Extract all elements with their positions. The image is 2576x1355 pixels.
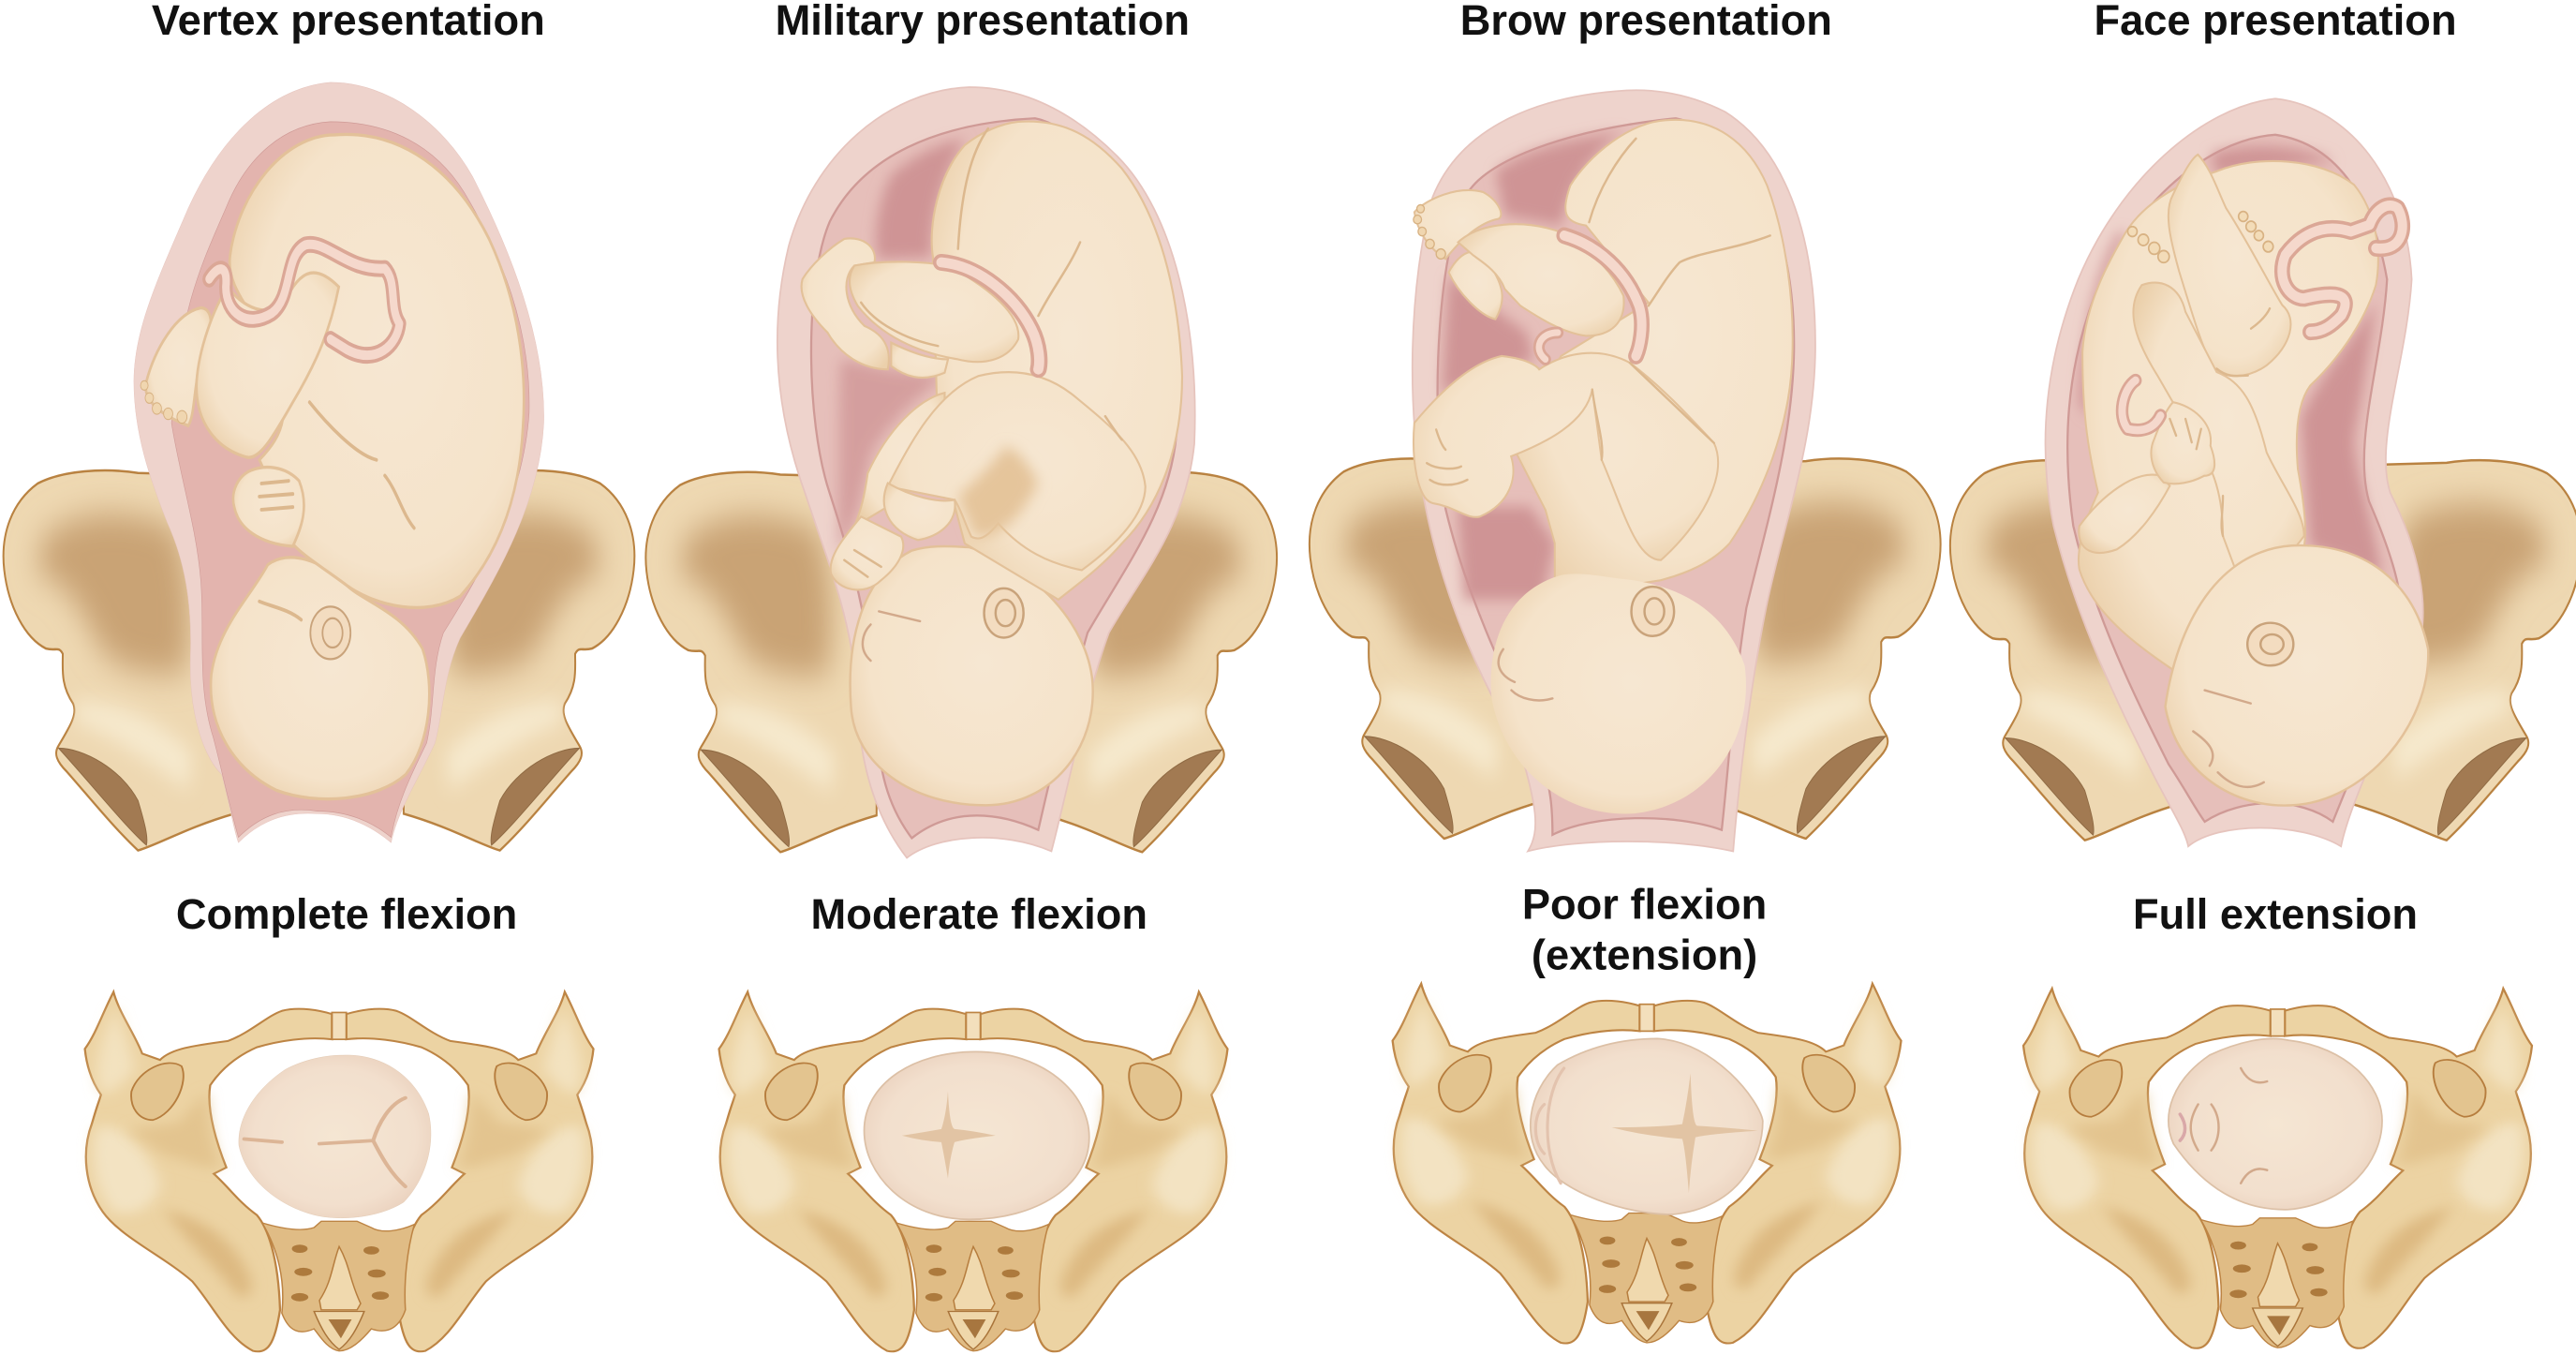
umbilical cord [2122, 205, 2403, 430]
toes [2127, 212, 2273, 262]
pelvis [645, 472, 1277, 852]
toes [1414, 205, 1445, 259]
fetal head with face [2169, 1038, 2382, 1210]
uterine cavity [811, 118, 1177, 838]
uterine cavity [1438, 118, 1794, 835]
knee hollow shading [958, 446, 1038, 537]
leg [197, 273, 339, 457]
label: Complete flexion: Complete flexion [176, 890, 517, 938]
panel: military fetus in uterus [645, 87, 1277, 857]
umbilical cord [941, 262, 1039, 369]
uterus [2045, 98, 2423, 846]
panel: face fetus in uterus [1950, 98, 2576, 846]
foot [1414, 190, 1501, 259]
foot [145, 308, 211, 425]
forearm [2079, 475, 2169, 553]
umbilical cord [1539, 235, 1642, 359]
uterus [1413, 90, 1815, 851]
lower leg [1458, 224, 1624, 335]
panel: moderate flexion pelvic view [719, 992, 1227, 1351]
shin of upper leg [2169, 155, 2290, 376]
fetal body [229, 134, 524, 607]
uterine cavity [171, 122, 529, 838]
pelvis [2023, 989, 2532, 1348]
hand [831, 516, 903, 589]
foot [802, 238, 889, 369]
pelvis [1393, 984, 1902, 1344]
uterine cavity [2067, 135, 2403, 822]
trunk [932, 122, 1182, 600]
lower leg [2133, 283, 2304, 587]
uterus [134, 82, 544, 842]
face [863, 611, 920, 661]
ear [310, 606, 350, 659]
ear [985, 588, 1024, 637]
trunk [1511, 120, 1793, 597]
panel: poor flexion pelvic view [1393, 984, 1902, 1344]
ear [2247, 623, 2293, 665]
fist [233, 468, 303, 546]
rear foot [891, 343, 948, 378]
umbilical cord [209, 245, 399, 355]
skin creases [844, 128, 1122, 577]
pelvis [85, 992, 593, 1351]
fetal head with sutures [239, 1055, 431, 1218]
panel: vertex fetus in uterus [4, 82, 634, 851]
label: Poor flexion (extension): (extension) [1532, 931, 1757, 979]
pelvis [719, 992, 1227, 1351]
label: Full extension: Full extension [2133, 890, 2418, 938]
thighs and arms [1414, 353, 1718, 560]
cavity shadows [837, 139, 965, 557]
cavity shadows [1443, 132, 1623, 600]
cavity shadows [2080, 146, 2382, 576]
lower leg [850, 261, 1018, 362]
fetal head [211, 558, 429, 799]
label: Poor flexion (extension): Poor flexion [1522, 880, 1767, 928]
fetus limbs and trunk [802, 122, 1182, 600]
fetus limbs and trunk [2079, 146, 2403, 687]
skin creases [2169, 308, 2270, 536]
fetal head with suture star [1531, 1038, 1763, 1214]
pelvis [1950, 460, 2576, 841]
ear [1632, 587, 1674, 636]
uterus [777, 87, 1195, 857]
panel: full extension pelvic view [2023, 989, 2532, 1348]
fetus limbs and trunk [1414, 120, 1793, 600]
fetal head with suture star [865, 1051, 1089, 1219]
fetal head [851, 546, 1093, 805]
thigh and knee [888, 372, 1146, 570]
panel: brow fetus in uterus [1310, 90, 1941, 851]
toes [141, 380, 187, 424]
fetal head [1491, 573, 1746, 813]
label: Moderate flexion: Moderate flexion [811, 890, 1147, 938]
skin creases [1427, 139, 1770, 484]
face [2193, 691, 2264, 787]
sole of second foot [1449, 252, 1503, 320]
trunk [2079, 161, 2378, 687]
hand [2151, 402, 2214, 484]
pelvis [1310, 458, 1941, 839]
face [1499, 649, 1552, 700]
fetal head [2166, 545, 2428, 806]
rear arm [854, 393, 944, 527]
wrist [884, 484, 955, 540]
pelvis [4, 470, 634, 851]
fist fingers and skin creases [259, 402, 414, 619]
panel: complete flexion pelvic view [85, 992, 593, 1351]
